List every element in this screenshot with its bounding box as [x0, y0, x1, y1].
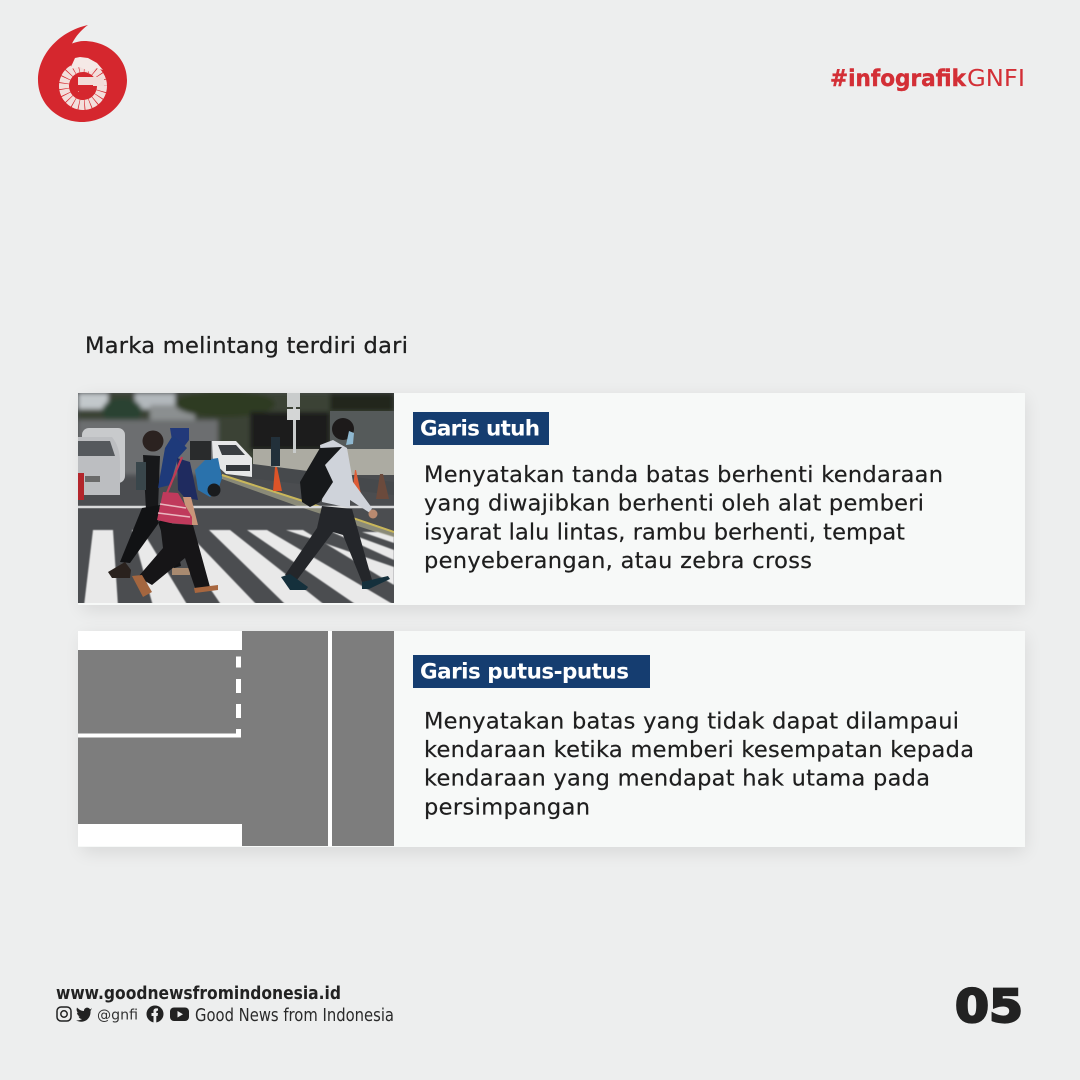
chip: garis utuh: [413, 412, 549, 445]
woman in hijab: [132, 428, 218, 597]
icon: instagram: [57, 1007, 71, 1021]
icon: youtube: [170, 1008, 189, 1021]
text: garis utuh description: isyarat lalu lintas, rambu berhenti, tempat: [424, 520, 905, 546]
text: garis utuh description: [424, 462, 943, 574]
section title: Marka melintang terdiri dari: [85, 333, 408, 359]
road diagram: [78, 631, 394, 846]
distant pedestrian: [271, 437, 280, 466]
hashtag heading: GNFI: [967, 66, 1025, 92]
icon: facebook: [146, 1006, 164, 1023]
zebra stripes: [84, 530, 396, 606]
chip: garis putus-putus: Garis putus-putus: [420, 660, 629, 684]
icon: twitter: [76, 1008, 92, 1022]
fence: [330, 411, 394, 449]
footer: social icons and handles: [57, 1006, 394, 1026]
chip: garis putus-putus: [413, 655, 650, 688]
text: garis utuh description: yang diwajibkan berhenti oleh alat pemberi: [424, 490, 924, 516]
page name: Good News from Indonesia: [195, 1006, 394, 1026]
scooter: [195, 458, 222, 497]
text: garis utuh description: penyeberangan, atau zebra cross: [424, 548, 812, 574]
chip: garis utuh: Garis utuh: [420, 416, 540, 442]
photo: pedestrians on a zebra crossing: [78, 391, 396, 606]
text: garis putus-putus description: kendaraan yang mendapat hak utama pada: [424, 766, 930, 792]
panel: garis utuh: [78, 391, 1025, 610]
panel: garis putus-putus: [78, 631, 1025, 852]
parked cars: [82, 428, 125, 483]
text: garis putus-putus description: persimpangan: [424, 794, 590, 820]
text: garis putus-putus description: [424, 708, 974, 820]
text: garis putus-putus description: Menyatakan batas yang tidak dapat dilampaui: [424, 708, 959, 734]
handle: @gnfi: [97, 1008, 138, 1024]
man with backpack: [281, 418, 390, 590]
sign post: [293, 407, 296, 453]
text: garis utuh description: Menyatakan tanda batas berhenti kendaraan: [424, 462, 943, 488]
logo: GNFI red six with eagle emblem: [38, 25, 127, 122]
traffic cones: [273, 467, 282, 491]
text: garis putus-putus description: kendaraan ketika memberi kesempatan kepada: [424, 737, 974, 763]
page number: 05: [955, 980, 1023, 1033]
woman behind: [108, 430, 190, 578]
footer: website: www.goodnewsfromindonesia.id: [56, 984, 341, 1004]
hashtag heading: #infografik: [830, 66, 967, 92]
